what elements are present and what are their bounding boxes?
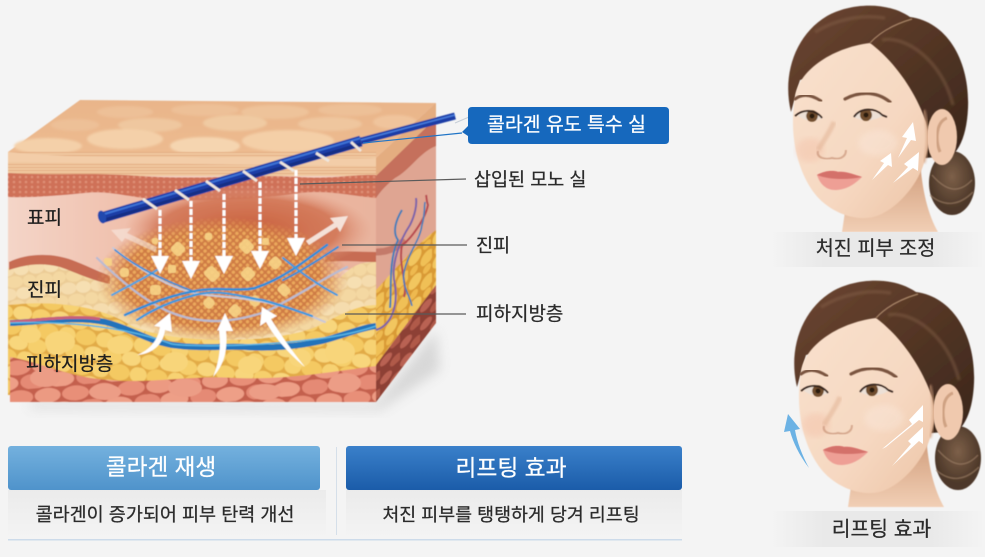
label: epidermis: 표피 [27,208,62,229]
lifting arrows [872,122,919,183]
top skin surface [8,100,436,158]
callout tag: special thread [462,107,669,144]
label: subcutaneous fat right: 피하지방층 [476,304,563,325]
skin block drop shadow [30,330,440,410]
yellow fat layer [8,303,376,395]
collagen threads [97,245,347,322]
blood vessel [10,195,428,348]
lower red band in dermis [9,255,110,284]
blue up arrow [784,414,809,468]
skin cross-section block [8,100,455,402]
caption: sagging skin correction: 처진 피부 조정 [816,238,935,260]
downward dashed arrows [151,170,305,279]
insertion thread rod [96,115,455,224]
label: subcutaneous fat left: 피하지방층 [26,354,113,375]
red lower fat [10,357,376,402]
caption strip 2 [770,511,985,547]
leader lines [300,179,467,314]
callout connector lines [363,117,469,143]
dermis pink [8,190,376,270]
text: lifting description: 처진 피부를 탱탱하게 당겨 리프팅 [382,504,640,525]
front face layers [8,152,376,402]
fat layer light [8,262,376,340]
label: dermis left: 진피 [27,280,62,301]
portrait 1: sagging skin [788,6,975,232]
dermal glow [124,186,372,274]
diagonal pale arrows [111,216,348,252]
label: inserted mono thread: 삽입된 모노 실 [474,169,586,190]
label: dermis right: 진피 [476,235,510,256]
heading: collagen regeneration: 콜라겐 재생 [106,455,216,480]
text: collagen regeneration description: 콜라겐이 증가되어 피부 탄력 개선 [36,504,294,525]
panel: lifting effect [346,446,682,538]
caption: lifting effect: 리프팅 효과 [832,519,931,541]
collagen mesh area [98,219,346,340]
panel: collagen regeneration [8,446,326,538]
right side face [376,103,436,402]
upper red band [8,173,376,200]
portrait 2: lifting effect [784,281,981,507]
lifting arrows [882,405,923,466]
upward curved arrows [137,307,305,377]
caption strip 1 [770,232,985,267]
callout text: 콜라겐 유도 특수 실 [487,114,646,136]
heading: lifting effect: 리프팅 효과 [455,455,567,481]
